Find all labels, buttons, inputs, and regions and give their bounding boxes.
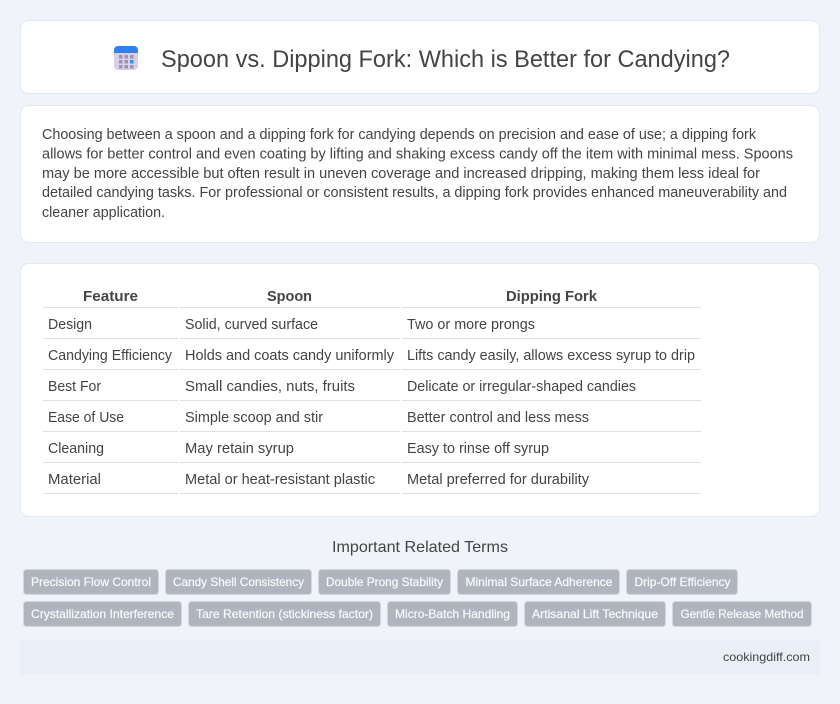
tag: Gentle Release Method: Gentle Release Method xyxy=(680,607,804,621)
tag: Tare Retention (stickiness factor) xyxy=(188,602,380,626)
row: Best For: Small candies, nuts, fruits xyxy=(185,379,355,395)
table header row: Spoon xyxy=(267,289,312,305)
row: Cleaning xyxy=(43,441,701,463)
tag: Candy Shell Consistency xyxy=(166,570,312,594)
table header row xyxy=(43,289,701,308)
heading: important related terms: Important Related Terms xyxy=(332,539,508,556)
tag: Drip-Off Efficiency xyxy=(626,570,738,594)
row: Ease of Use: Ease of Use xyxy=(48,410,124,426)
intro text block: may be more accessible but often result in uneven coverage and increased dripping, making them less ideal for xyxy=(42,166,760,182)
tag: Micro-Batch Handling: Micro-Batch Handling xyxy=(395,607,510,621)
row: Design: Design xyxy=(48,317,92,333)
row: Best For: Best For xyxy=(48,379,101,395)
tag: Precision Flow Control: Precision Flow Control xyxy=(31,575,151,589)
title: Spoon vs. Dipping Fork: Which is Better for Candying? xyxy=(161,46,730,73)
tag: Artisanal Lift Technique xyxy=(524,602,666,626)
row: Ease of Use: Simple scoop and stir xyxy=(185,410,323,426)
intro text block: cleaner application. xyxy=(42,205,165,221)
row: Material: Metal preferred for durability xyxy=(407,472,590,488)
tag: Double Prong Stability xyxy=(318,570,450,594)
footer bar xyxy=(20,640,820,674)
tag: Gentle Release Method xyxy=(672,602,812,626)
intro text block xyxy=(42,127,793,221)
row: Candying Efficiency: Candying Efficiency xyxy=(48,348,173,364)
tag: Artisanal Lift Technique: Artisanal Lift Technique xyxy=(532,607,658,621)
tag: Micro-Batch Handling xyxy=(388,602,518,626)
intro text block: Choosing between a spoon and a dipping fork for candying depends on precision and ease of use; a dipping fork xyxy=(42,127,757,143)
tag: Double Prong Stability: Double Prong Stability xyxy=(326,575,443,589)
tag: Precision Flow Control xyxy=(24,570,158,594)
row: Material: Material xyxy=(48,472,101,488)
row: Ease of Use xyxy=(43,410,701,432)
header panel xyxy=(20,20,820,94)
row: Cleaning: Cleaning xyxy=(48,441,104,457)
row: Cleaning: May retain syrup xyxy=(185,441,294,457)
tag: Crystallization Interference xyxy=(24,602,182,626)
panel: introduction xyxy=(20,106,820,242)
tag: Candy Shell Consistency: Candy Shell Consistency xyxy=(173,575,304,589)
tag: Tare Retention (stickiness factor): Tare Retention (stickiness factor) xyxy=(196,607,373,621)
row: Candying Efficiency: Lifts candy easily, allows excess syrup to drip xyxy=(407,348,695,364)
row: Design xyxy=(43,317,701,339)
tag: Crystallization Interference: Crystallization Interference xyxy=(31,607,174,621)
row: Best For xyxy=(43,379,701,401)
row: Material: Metal or heat-resistant plastic xyxy=(185,472,375,488)
intro text block: allows for better control and even coating by lifting and shaking excess candy off the item with minimal mess. Spoons xyxy=(42,146,793,162)
row: Candying Efficiency: Holds and coats candy uniformly xyxy=(185,348,395,364)
row: Cleaning: Easy to rinse off syrup xyxy=(407,441,549,457)
tag: Minimal Surface Adherence xyxy=(458,570,620,594)
table header row: Dipping Fork xyxy=(506,289,598,305)
tag: Minimal Surface Adherence: Minimal Surface Adherence xyxy=(466,575,613,589)
icon: calendar xyxy=(114,46,138,70)
panel: comparison table xyxy=(20,264,820,516)
row: Ease of Use: Better control and less mess xyxy=(407,410,589,426)
tag: Drip-Off Efficiency: Drip-Off Efficiency xyxy=(634,575,730,589)
row: Design: Solid, curved surface xyxy=(185,317,318,333)
row: Material xyxy=(43,472,701,494)
related terms tags xyxy=(24,570,812,626)
row: Best For: Delicate or irregular-shaped candies xyxy=(407,379,636,395)
intro text block: detailed candying tasks. For professional or consistent results, a dipping fork provides enhanced maneuverability and xyxy=(42,185,787,201)
footer site name: cookingdiff.com xyxy=(723,650,810,664)
row: Candying Efficiency xyxy=(43,348,701,370)
row: Design: Two or more prongs xyxy=(407,317,535,333)
table header row: Feature xyxy=(83,289,138,305)
